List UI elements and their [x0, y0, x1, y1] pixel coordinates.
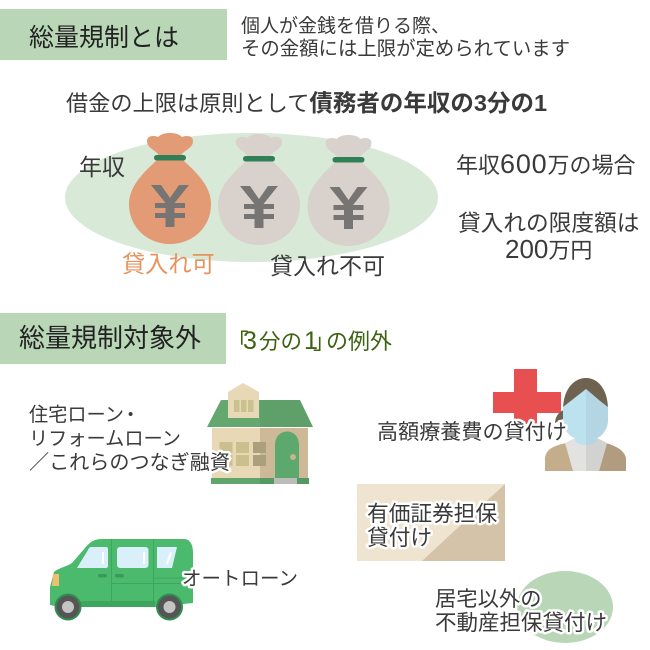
text block: auto loan: オートローン [182, 568, 298, 590]
label: 貸入れ不可: 貸入れ不可 [270, 253, 385, 279]
panel: heading 総量規制とは [0, 9, 227, 60]
subheading: 3分の1の例外: 「 [227, 330, 249, 354]
text block: housing loan [29, 404, 230, 474]
text block: headline: 借金の上限は原則として債務者の年収の3分の1 [66, 90, 547, 116]
icon: house [207, 383, 313, 484]
subheading: 3分の1の例外: の例外 [326, 329, 392, 354]
icon: money bag orange [129, 133, 211, 244]
text block: intro: その金額には上限が定められています [241, 38, 570, 60]
subheading: 3分の1の例外: 」 [313, 330, 335, 354]
text block: example 600万 [456, 149, 640, 264]
panel: securities card: 有価証券担保 [367, 501, 497, 526]
subheading: 3分の1の例外: 1 [304, 327, 318, 355]
subheading: 3分の1の例外: 3 [243, 327, 257, 355]
panel: heading 総量規制対象外: 総量規制対象外 [19, 323, 201, 353]
text block: medical loan: 高額療養費の貸付け [377, 420, 567, 444]
panel: heading 総量規制対象外 [0, 313, 226, 364]
text block: housing loan: リフォームローン [29, 429, 181, 450]
panel: securities card: 貸付け [367, 525, 432, 550]
icon: green ellipse [517, 571, 613, 643]
subheading: 3分の1の例外: 分の [259, 330, 302, 354]
text block: example 600万: 貸入れの限度額は [458, 210, 640, 236]
text block: intro [241, 15, 570, 60]
icon: car [50, 539, 193, 620]
icon: red cross [493, 369, 561, 424]
text block: example 600万: 年収600万の場合 [456, 149, 635, 179]
text block: example 600万: 200万円 [505, 234, 592, 264]
panel: income ellipse [65, 133, 438, 262]
icon: money bag grey 2 [308, 135, 390, 246]
panel: heading 総量規制とは: 総量規制とは [29, 24, 179, 52]
panel: securities card [357, 484, 505, 561]
text block: housing loan: 住宅ローン・ [29, 404, 140, 426]
text block: non-residential real estate loan: 居宅以外の [435, 587, 542, 611]
text block: non-residential real estate loan: 不動産担保貸付け [435, 611, 607, 635]
text block: housing loan: ／これらのつなぎ融資 [29, 451, 230, 474]
text block: non-residential real estate loan [435, 587, 607, 635]
icon: person [545, 378, 626, 471]
label: 貸入れ可: 貸入れ可 [122, 251, 215, 277]
text block: intro: 個人が金銭を借りる際、 [241, 15, 450, 37]
label: 年収: 年収 [79, 154, 125, 180]
icon: money bag grey 1 [218, 134, 300, 245]
